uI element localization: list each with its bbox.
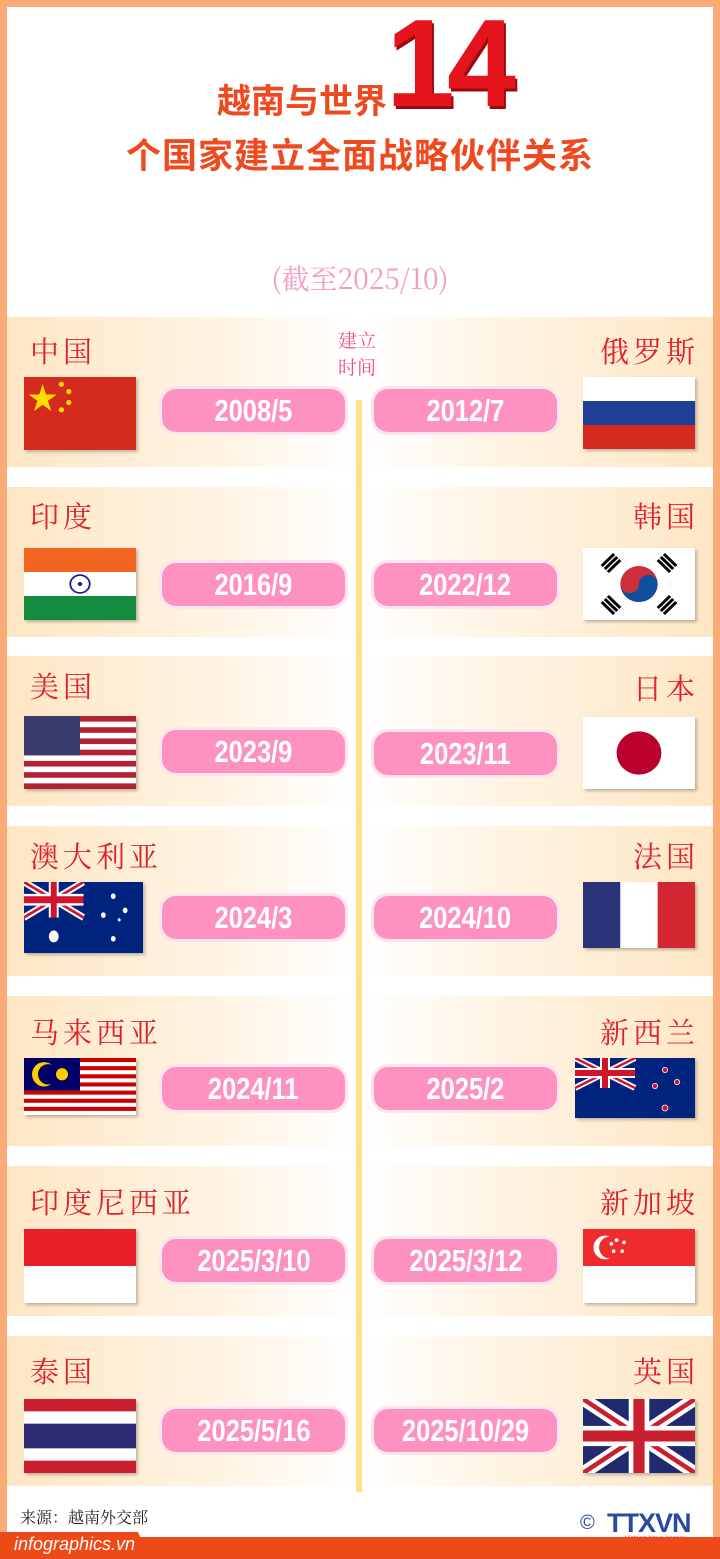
- date: UK: 2025/10/29: [402, 1413, 529, 1448]
- date: Japan: [374, 732, 557, 775]
- flag: Thailand: [24, 1399, 136, 1473]
- date: Indonesia: [162, 1239, 345, 1282]
- title line 1: 越南与世界: [217, 83, 387, 121]
- footer bar: [0, 1537, 720, 1559]
- date: India: [162, 563, 345, 606]
- footer tab: infographics.vn: infographics.vn: [14, 1534, 135, 1554]
- date: France: [374, 896, 557, 939]
- date: Malaysia: 2024/11: [208, 1071, 299, 1106]
- date: USA: [162, 730, 345, 773]
- timeline label: 时间: [338, 353, 376, 380]
- logo: TTXVN: [580, 1508, 691, 1542]
- date: Malaysia: [162, 1067, 345, 1110]
- date: China: 2008/5: [215, 393, 292, 428]
- date: Indonesia: 2025/3/10: [197, 1243, 310, 1278]
- timeline line: [356, 400, 362, 1492]
- date: USA: 2023/9: [215, 734, 292, 769]
- source text: 来源：越南外交部: [20, 1505, 148, 1528]
- title: [126, 0, 594, 176]
- name: India: 印度: [30, 495, 96, 536]
- date: Thailand: [162, 1409, 345, 1452]
- date: Russia: [374, 389, 557, 432]
- flag: Russia: [583, 377, 695, 449]
- logo: TTXVN: ©: [580, 1512, 595, 1534]
- flag: Japan: [583, 717, 695, 789]
- date: Australia: 2024/3: [215, 900, 292, 935]
- flag: USA: [24, 716, 136, 789]
- name: Thailand: 泰国: [30, 1350, 96, 1391]
- date: Russia: 2012/7: [427, 393, 504, 428]
- flag: Australia: [24, 882, 143, 953]
- flag: Singapore: [583, 1229, 695, 1303]
- date: India: 2016/9: [215, 567, 292, 602]
- bands: [7, 317, 713, 467]
- flag: France: [583, 882, 695, 948]
- name: USA: 美国: [30, 665, 96, 706]
- row 1: [24, 330, 699, 454]
- row 7: [24, 1350, 699, 1476]
- flag: Indonesia: [24, 1229, 136, 1303]
- logo: TTXVN: Vietnam News Agency: [625, 1536, 685, 1542]
- row 5: [24, 1011, 699, 1122]
- date: New Zealand: 2025/2: [427, 1071, 504, 1106]
- name: Singapore: 新加坡: [600, 1181, 699, 1222]
- row 3: [24, 665, 699, 792]
- name: Indonesia: 印度尼西亚: [30, 1181, 195, 1222]
- flag: China: [24, 377, 136, 450]
- name: UK: 英国: [633, 1350, 699, 1391]
- flag: Korea: [583, 548, 695, 620]
- timeline label: [338, 326, 376, 380]
- flag: UK: [583, 1399, 695, 1473]
- name: New Zealand: 新西兰: [600, 1011, 699, 1052]
- title line 2: 个国家建立全面战略伙伴关系: [126, 137, 594, 176]
- logo: TTXVN: TTXVN: [607, 1508, 691, 1538]
- name: Russia: 俄罗斯: [600, 330, 699, 371]
- row 4: [24, 835, 699, 956]
- flag: New Zealand: [575, 1058, 695, 1118]
- flag: Malaysia: [24, 1058, 136, 1115]
- date: France: 2024/10: [420, 900, 511, 935]
- subtitle date: (截至2025/10): [271, 258, 449, 298]
- date: Australia: [162, 896, 345, 939]
- name: Japan: 日本: [633, 667, 699, 708]
- flag: India: [24, 548, 136, 620]
- name: Korea: 韩国: [633, 495, 699, 536]
- name: France: 法国: [633, 835, 699, 876]
- timeline label: 建立: [338, 326, 376, 353]
- name: Australia: 澳大利亚: [30, 835, 162, 876]
- date: Japan: 2023/11: [420, 736, 511, 771]
- date: Singapore: 2025/3/12: [409, 1243, 522, 1278]
- date: China: [162, 389, 345, 432]
- name: Malaysia: 马来西亚: [30, 1011, 162, 1052]
- date: Korea: 2022/12: [420, 567, 511, 602]
- date: New Zealand: [374, 1067, 557, 1110]
- row 2: [24, 495, 699, 624]
- date: Korea: [374, 563, 557, 606]
- row 6: [24, 1181, 699, 1306]
- date: UK: [374, 1409, 557, 1452]
- date: Singapore: [374, 1239, 557, 1282]
- date: Thailand: 2025/5/16: [197, 1413, 310, 1448]
- name: China: 中国: [30, 330, 96, 371]
